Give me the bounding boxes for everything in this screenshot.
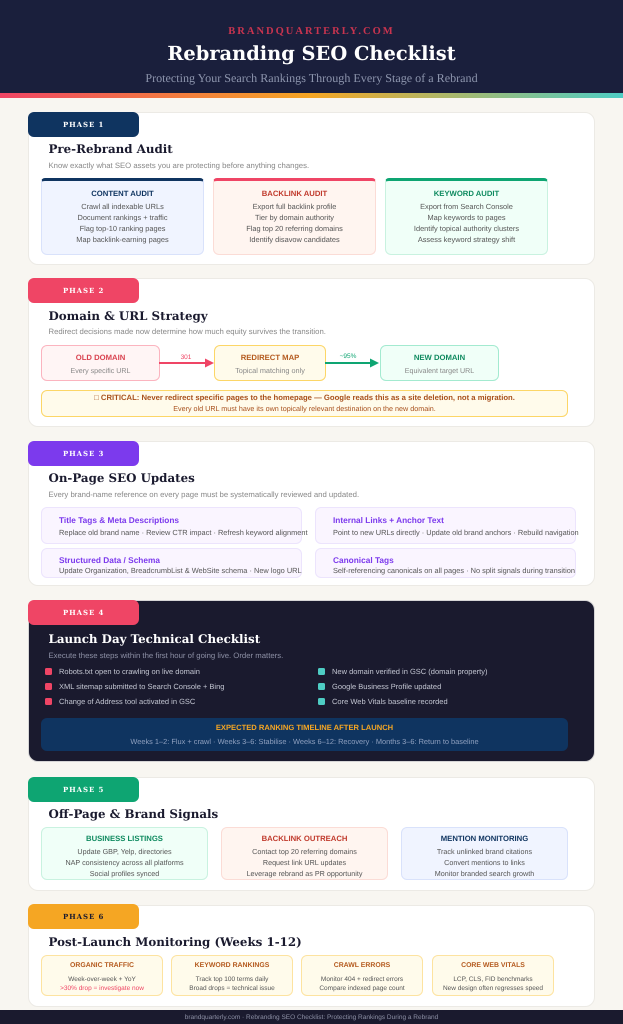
backlink outreach box [221,827,388,880]
old domain box: OLD DOMAIN [76,352,125,362]
phase 6 badge [28,904,139,929]
business listings box: Social profiles synced [90,868,159,878]
business listings box: BUSINESS LISTINGS [86,834,163,842]
core web vitals box [432,955,554,996]
keyword audit box: Export from Search Console [420,202,513,211]
check label: Robots.txt open to crawling on live domain [59,667,200,676]
phase 6 heading: Post-Launch Monitoring (Weeks 1-12) [48,935,302,949]
phase 4 description: Execute these steps within the first hour of going live. Order matters. [48,651,283,660]
content audit box: Flag top-10 ranking pages [80,224,165,233]
backlink outreach box: BACKLINK OUTREACH [262,834,347,842]
phase 3 heading: On-Page SEO Updates [48,471,195,485]
checklist right column [318,667,487,706]
new domain box: Equivalent target URL [405,366,474,374]
business listings box: Update GBP, Yelp, directories [77,846,172,856]
critical warning callout: Every old URL must have its own topically relevant destination on the new domain. [173,404,436,413]
phase 5 badge: PHASE 5 [63,785,104,794]
phase 4 heading: Launch Day Technical Checklist [48,632,260,646]
organic traffic box: ORGANIC TRAFFIC [70,962,134,968]
footer [0,1010,623,1024]
expected ranking timeline box: EXPECTED RANKING TIMELINE AFTER LAUNCH [216,723,393,732]
keyword audit box: KEYWORD AUDIT [434,189,499,198]
structured data box: Update Organization, BreadcrumbList & WebSite schema · New logo URL [59,566,302,574]
redirect map box: REDIRECT MAP [241,352,299,362]
phase 5 heading: Off-Page & Brand Signals [48,807,218,821]
check item [318,698,325,705]
arrow: 95 percent equity [325,353,379,368]
phase 1 badge: PHASE 1 [63,120,104,129]
backlink audit box: Flag top 20 referring domains [246,224,343,233]
organic traffic box: >30% drop = investigate now [60,985,144,992]
phase 1 badge [28,112,139,137]
check item [45,683,52,690]
backlink outreach box: Request link URL updates [263,858,346,866]
crawl errors box: CRAWL ERRORS [334,962,390,968]
check label: XML sitemap submitted to Search Console + Bing [59,682,224,691]
critical warning callout: □ CRITICAL: Never redirect specific pages to the homepage — Google reads this as a site deletion, not a migration. [94,393,515,402]
core web vitals box: New design often regresses speed [443,985,543,992]
old domain box: Every specific URL [71,366,130,374]
panel: phase 1 [28,112,595,265]
backlink outreach box: Leverage rebrand as PR opportunity [247,868,362,878]
phase 5 badge [28,777,139,802]
critical warning callout [41,390,568,417]
panel: phase 4 [28,600,595,762]
phase 3 description: Every brand-name reference on every page must be systematically reviewed and updated. [48,490,359,499]
keyword audit box: Identify topical authority clusters [414,224,519,233]
check label: Core Web Vitals baseline recorded [332,697,448,706]
phase 3 badge [28,441,139,466]
mention monitoring box: Track unlinked brand citations [437,846,532,856]
mention monitoring box: Convert mentions to links [444,858,525,866]
business listings box: NAP consistency across all platforms [65,858,184,866]
content audit box [41,178,204,255]
keyword audit box: Map keywords to pages [427,213,506,222]
phase 2 badge [28,278,139,303]
backlink audit box: BACKLINK AUDIT [262,189,327,198]
keyword audit box: Assess keyword strategy shift [418,235,515,244]
keyword rankings box: Track top 100 terms daily [196,976,268,982]
check item [45,698,52,705]
keyword rankings box: Broad drops = technical issue [189,985,275,992]
backlink audit box: Export full backlink profile [253,202,336,211]
title: Rebranding SEO Checklist [167,42,456,65]
expected ranking timeline box: Weeks 1–2: Flux + crawl · Weeks 3–6: Stabilise · Weeks 6–12: Recovery · Months 3–6: Return to baseline [130,737,479,746]
keyword rankings box: KEYWORD RANKINGS [195,962,269,968]
check label: New domain verified in GSC (domain property) [332,667,487,676]
core web vitals box: CORE WEB VITALS [461,962,525,968]
mention monitoring box: Monitor branded search growth [435,868,534,878]
content audit box: Document rankings + traffic [77,213,168,222]
mention monitoring box [401,827,568,880]
phase 4 badge [28,600,139,625]
panel: phase 6 [28,905,595,1007]
check item [45,668,52,675]
content audit box: Map backlink-earning pages [76,235,169,244]
crawl errors box: Monitor 404 + redirect errors [321,976,403,982]
title tags box: Title Tags & Meta Descriptions [59,514,179,524]
crawl errors box: Compare indexed page count [319,985,405,992]
expected ranking timeline box [41,718,568,751]
phase 2 description: Redirect decisions made now determine how much equity survives the transition. [48,327,326,336]
redirect map box [214,345,326,381]
new domain box: NEW DOMAIN [414,352,465,362]
backlink audit box: Tier by domain authority [255,213,334,222]
title tags box: Replace old brand name · Review CTR impact · Refresh keyword alignment [59,528,308,537]
brand domain: BRANDQUARTERLY.COM [228,26,395,36]
header banner [0,0,623,93]
arrow: 301 redirect [159,354,214,368]
panel: phase 3 [28,441,595,586]
redirect map box: Topical matching only [235,366,305,374]
canonical tags box: Self-referencing canonicals on all pages · No split signals during transition [333,566,575,574]
new domain box [380,345,499,381]
backlink audit box [213,178,376,255]
panel: phase 5 [28,777,595,891]
content audit box: CONTENT AUDIT [91,189,154,198]
business listings box [41,827,208,880]
mention monitoring box: MENTION MONITORING [441,834,528,842]
checklist left column [45,667,224,706]
content audit box: Crawl all indexable URLs [81,202,164,211]
check label: Change of Address tool activated in GSC [59,697,195,706]
internal links box: Internal Links + Anchor Text [333,514,444,524]
phase 1 heading: Pre-Rebrand Audit [48,142,173,156]
structured data box: Structured Data / Schema [59,554,160,564]
backlink audit box: Identify disavow candidates [249,235,340,244]
internal links box [315,507,576,544]
core web vitals box: LCP, CLS, FID benchmarks [453,976,533,982]
check item [318,668,325,675]
old domain box [41,345,160,381]
footer: brandquarterly.com · Rebranding SEO Checklist: Protecting Rankings During a Rebrand [185,1014,438,1020]
phase 2 heading: Domain & URL Strategy [48,309,208,323]
check label: Google Business Profile updated [332,682,441,691]
internal links box: Point to new URLs directly · Update old brand anchors · Rebuild navigation [333,528,579,537]
structured data box [41,548,302,578]
title tags box [41,507,302,544]
keyword rankings box [171,955,293,996]
canonical tags box: Canonical Tags [333,554,394,564]
phase 1 description: Know exactly what SEO assets you are protecting before anything changes. [48,161,309,170]
subtitle: Protecting Your Search Rankings Through Every Stage of a Rebrand [145,71,478,85]
phase 6 badge: PHASE 6 [63,912,104,921]
organic traffic box [41,955,163,996]
arrow: 301 redirect: 301 [181,354,192,361]
backlink outreach box: Contact top 20 referring domains [252,846,357,856]
canonical tags box [315,548,576,578]
check item [318,683,325,690]
rainbow gradient stripe [0,93,623,98]
arrow: 95 percent equity: ~95% [340,353,357,360]
keyword audit box [385,178,548,255]
phase 2 badge: PHASE 2 [63,286,104,295]
phase 3 badge: PHASE 3 [63,449,104,458]
crawl errors box [301,955,423,996]
organic traffic box: Week-over-week + YoY [68,976,136,982]
phase 4 badge: PHASE 4 [63,608,104,617]
panel: phase 2 [28,278,595,427]
